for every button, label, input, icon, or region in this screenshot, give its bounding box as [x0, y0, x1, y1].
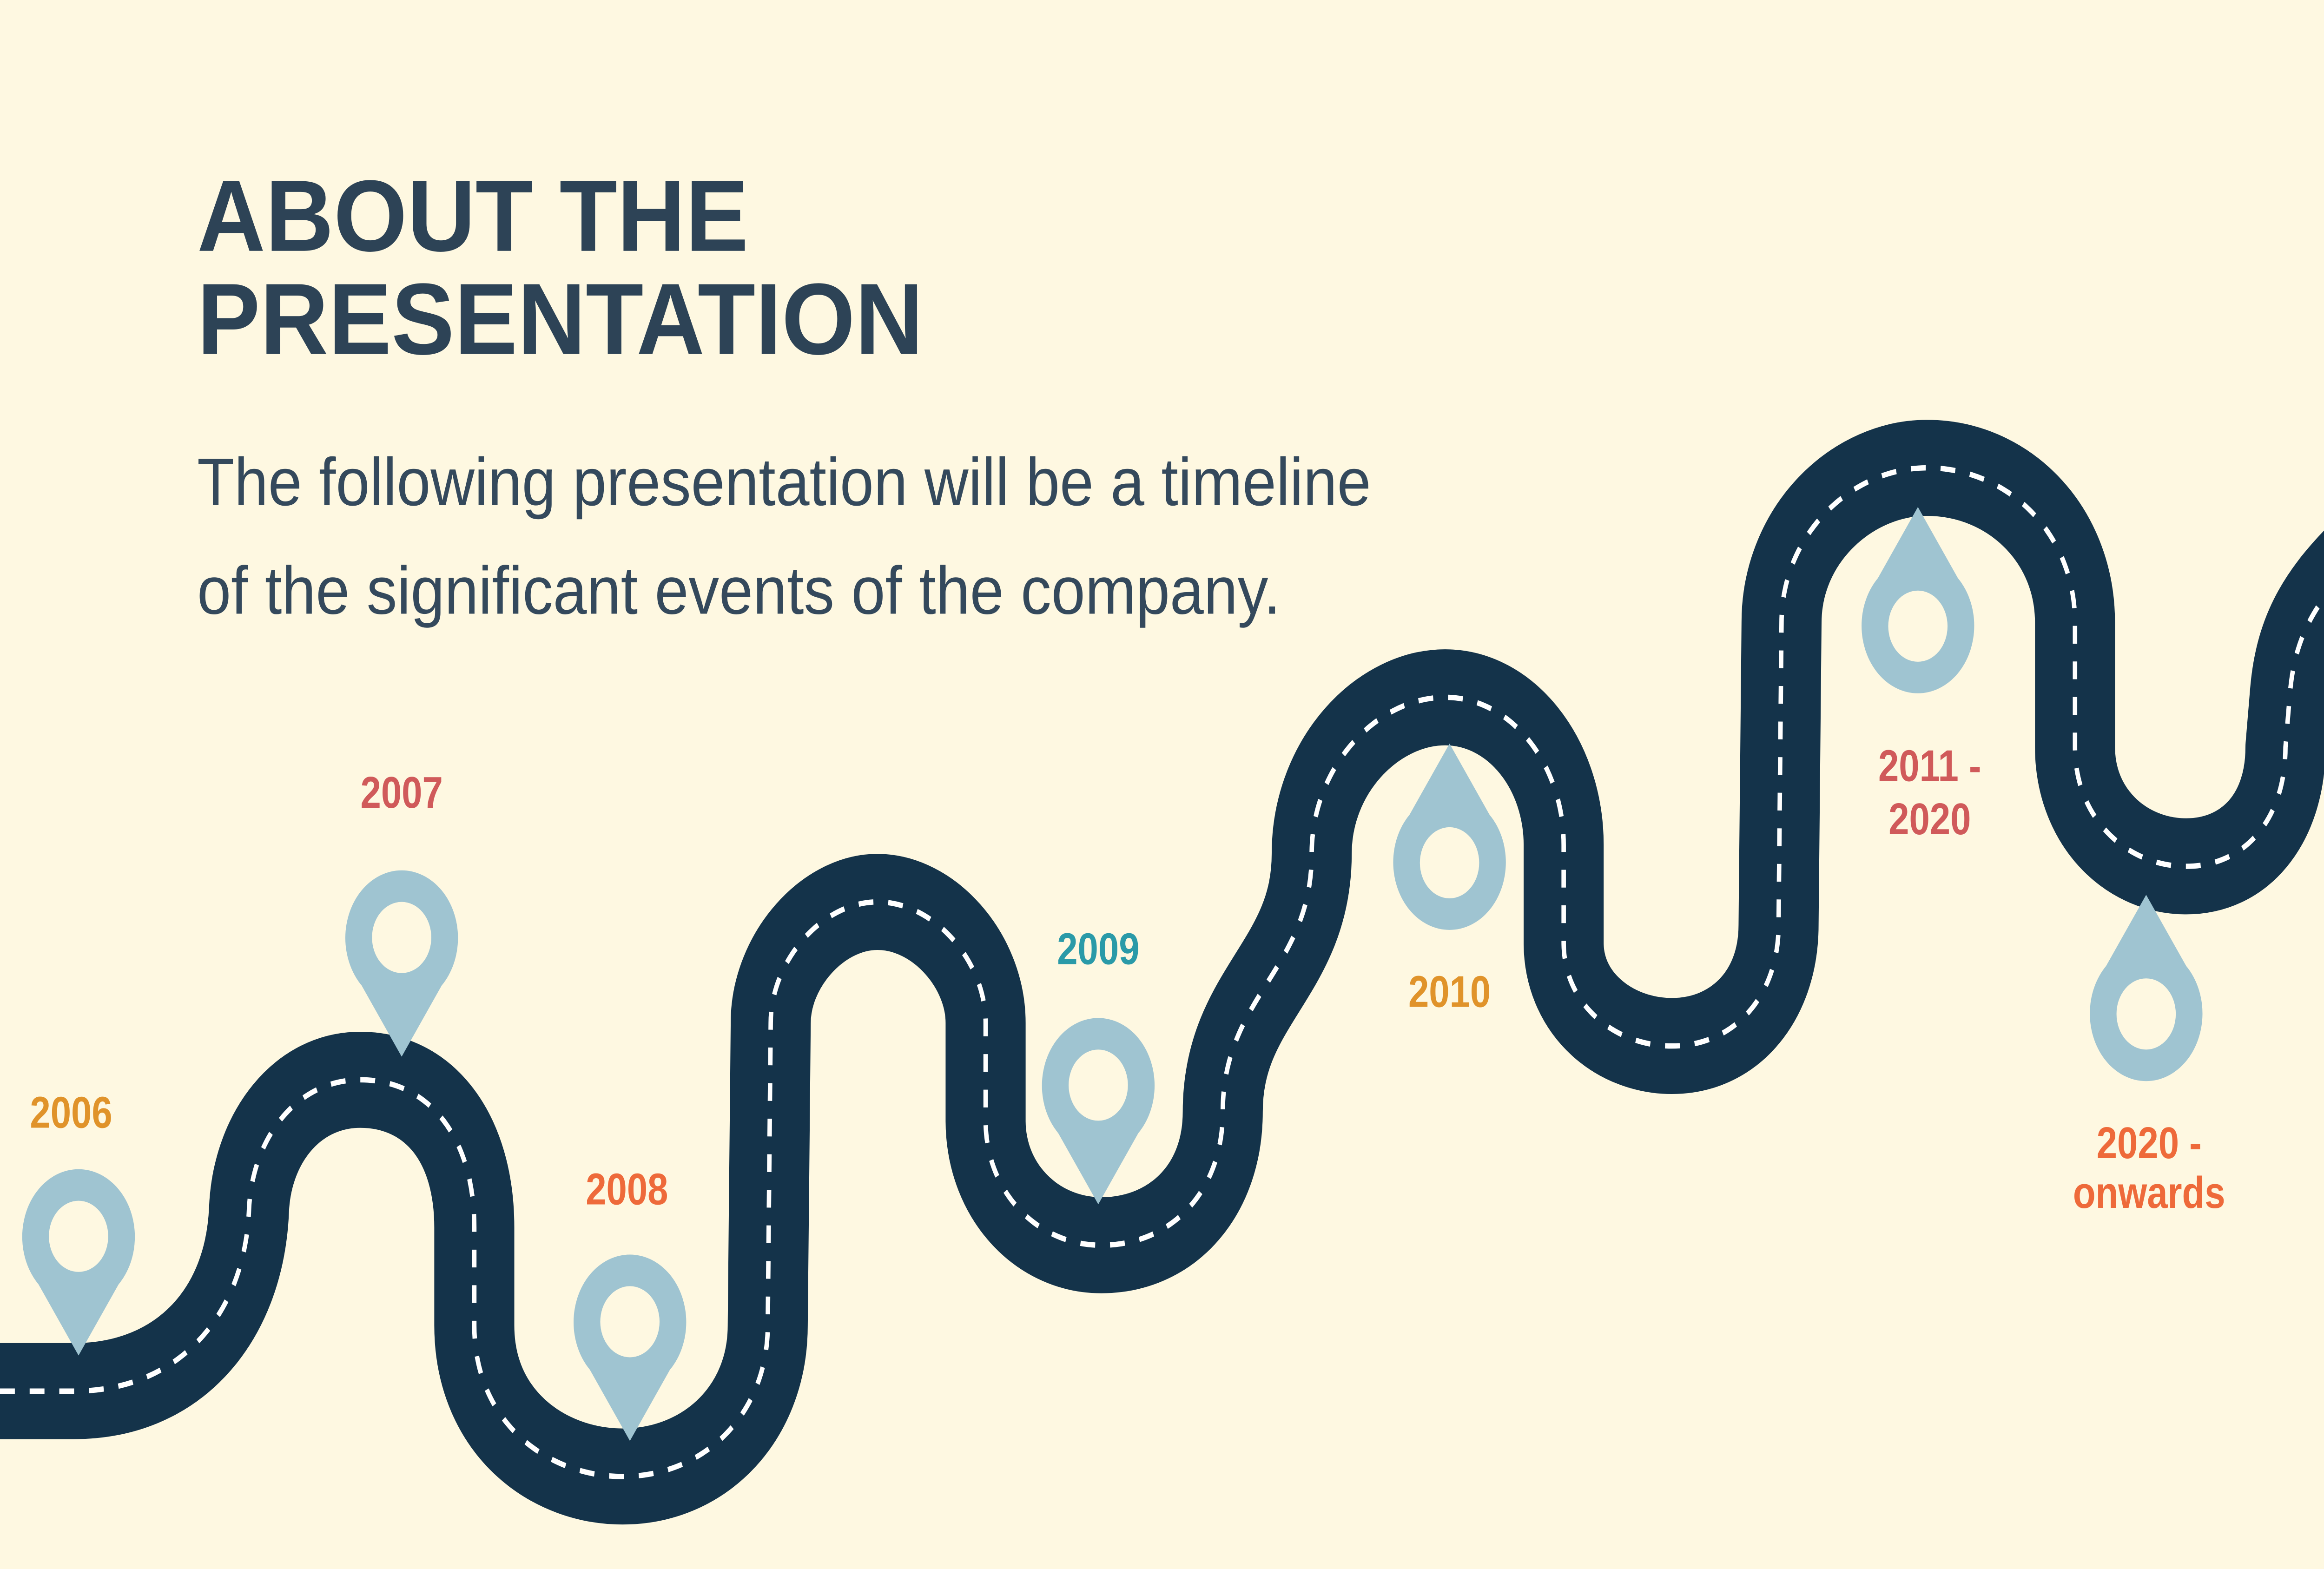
title: PRESENTATION — [197, 262, 924, 376]
road — [0, 468, 2324, 1477]
year labels: 2020 — [1888, 794, 1971, 844]
icon: pin 2010 — [1393, 744, 1506, 930]
icon: pin 2007 — [345, 870, 458, 1057]
year labels: 2008 — [586, 1164, 668, 1214]
icon: pin 2020-onwards — [2090, 895, 2203, 1081]
year labels — [30, 740, 2225, 1218]
year labels: 2020 - — [2097, 1118, 2202, 1167]
year labels: 2009 — [1057, 924, 1140, 974]
icon: pin 2006 — [22, 1169, 135, 1356]
subtitle text — [197, 445, 1371, 628]
title: ABOUT THE — [197, 159, 748, 272]
year labels: 2007 — [361, 767, 443, 817]
icon: pin 2011-2020 — [1862, 507, 1974, 693]
subtitle text: The following presentation will be a timeline — [197, 445, 1371, 520]
icon: pin 2009 — [1042, 1018, 1155, 1204]
year labels: 2006 — [30, 1088, 112, 1137]
year labels: onwards — [2073, 1167, 2225, 1218]
year labels: 2011 - — [1878, 740, 1981, 791]
year labels: 2010 — [1408, 967, 1491, 1016]
icon: pin 2008 — [574, 1255, 686, 1441]
subtitle text: of the significant events of the company. — [197, 553, 1281, 628]
title — [197, 159, 924, 376]
